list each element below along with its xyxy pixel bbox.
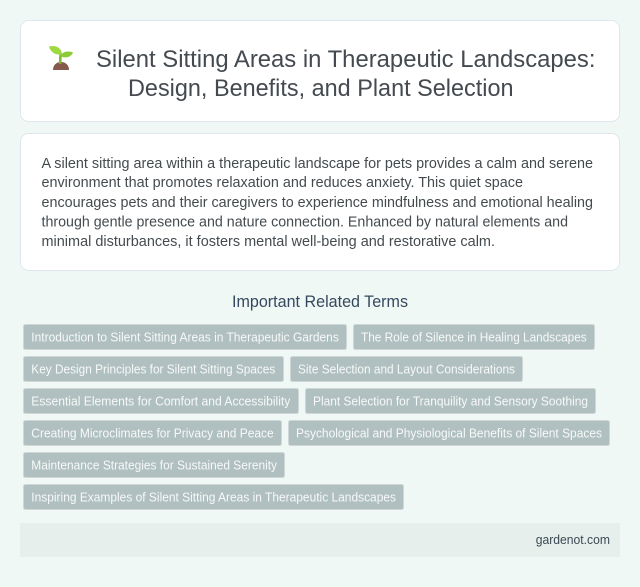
tag: essential elements xyxy=(24,388,298,414)
tag: site selection: Site Selection and Layout Considerations xyxy=(298,362,515,376)
tag: essential elements: Essential Elements for Comfort and Accessibility xyxy=(31,394,291,408)
tag: psychological benefits xyxy=(288,420,610,446)
tag: key design principles xyxy=(24,356,284,382)
tag: role of silence: The Role of Silence in Healing Landscapes xyxy=(361,330,587,344)
panel: header card xyxy=(20,20,620,122)
tag: plant selection xyxy=(306,388,596,414)
panel: description card xyxy=(20,134,620,270)
tag: psychological benefits: Psychological and Physiological Benefits of Silent Spaces xyxy=(296,426,602,440)
text block: description: encourages pets and their caregivers to experience mindfulness and emotional healing xyxy=(42,194,593,211)
tag: role of silence xyxy=(354,324,594,350)
text block: description: through gentle presence and nature connection. Enhanced by natural elements and xyxy=(42,214,568,230)
icon: seedling xyxy=(49,46,73,70)
text block: description: environment that promotes relaxation and reduces anxiety. This quiet space xyxy=(42,174,523,191)
tag: maintenance strategies: Maintenance Strategies for Sustained Serenity xyxy=(31,458,278,472)
heading: important related terms: Important Related Terms xyxy=(232,293,408,311)
tag: introduction: Introduction to Silent Sitting Areas in Therapeutic Gardens xyxy=(31,330,339,344)
title xyxy=(96,46,596,102)
text block: description: A silent sitting area within a therapeutic landscape for pets provides a calm and serene xyxy=(42,155,593,172)
tag: microclimates xyxy=(24,420,282,446)
tag: plant selection: Plant Selection for Tranquility and Sensory Soothing xyxy=(313,394,588,408)
tag: key design principles: Key Design Principles for Silent Sitting Spaces xyxy=(31,362,275,376)
footer bar xyxy=(20,523,620,557)
tag: inspiring examples: Inspiring Examples of Silent Sitting Areas in Therapeutic Landscapes xyxy=(31,490,396,504)
text block: description xyxy=(42,155,593,250)
footer: site name: gardenot.com xyxy=(536,533,610,547)
tag: introduction xyxy=(24,324,346,350)
title: Design, Benefits, and Plant Selection xyxy=(128,75,514,102)
tag: site selection xyxy=(290,356,522,382)
tag: microclimates: Creating Microclimates for Privacy and Peace xyxy=(31,426,274,440)
tag: maintenance strategies xyxy=(24,452,284,478)
tag: inspiring examples xyxy=(24,484,404,510)
text block: description: minimal disturbances, it fosters mental well-being and restorative calm. xyxy=(42,233,495,250)
panel: related term tags xyxy=(24,324,610,510)
title: Silent Sitting Areas in Therapeutic Landscapes: xyxy=(96,46,596,73)
